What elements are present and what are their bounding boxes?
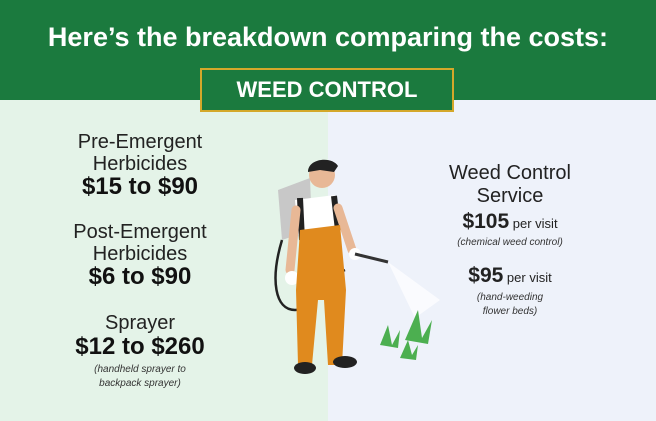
right column: service: flower beds) [483, 306, 537, 317]
left column: prices: $12 to $260 [75, 333, 205, 360]
right column: service: $95 per visit [468, 264, 552, 287]
boots [294, 362, 316, 374]
arms [290, 210, 296, 270]
weed control label box: WEED CONTROL [237, 77, 417, 102]
pre-emergent: Herbicides [93, 153, 187, 175]
weeds [380, 310, 432, 360]
weed control label box [200, 68, 454, 112]
pre-emergent [78, 131, 202, 175]
left column: prices: backpack sprayer) [99, 378, 181, 389]
post-emergent [73, 221, 207, 265]
header band [0, 0, 656, 100]
right column: service: Weed Control [449, 162, 571, 184]
right column: service: (hand-weeding [477, 292, 543, 303]
sprayer: Sprayer [105, 312, 175, 334]
right column: service: (chemical weed control) [457, 237, 563, 248]
wand [355, 254, 388, 262]
post-emergent: Post-Emergent [73, 221, 207, 243]
overalls [296, 225, 346, 365]
left column: prices: (handheld sprayer to [94, 364, 186, 375]
left column: prices [73, 131, 207, 389]
head/hair [309, 162, 335, 188]
pre-emergent: Pre-Emergent [78, 131, 202, 153]
post-emergent: Herbicides [93, 243, 187, 265]
hose [276, 240, 345, 310]
spray [388, 262, 440, 318]
right column: service: Service [477, 185, 543, 207]
backpack [278, 178, 312, 240]
right column: service: $105 per visit [462, 210, 558, 233]
right column: service [449, 162, 571, 317]
left column: prices: $6 to $90 [89, 263, 191, 290]
illustration: man spraying weeds [274, 160, 440, 374]
shirt [295, 195, 340, 235]
straps [300, 196, 338, 240]
left panel background [0, 100, 328, 421]
left column: prices: $15 to $90 [82, 173, 198, 200]
title: Here’s the breakdown comparing the costs: [48, 22, 608, 52]
